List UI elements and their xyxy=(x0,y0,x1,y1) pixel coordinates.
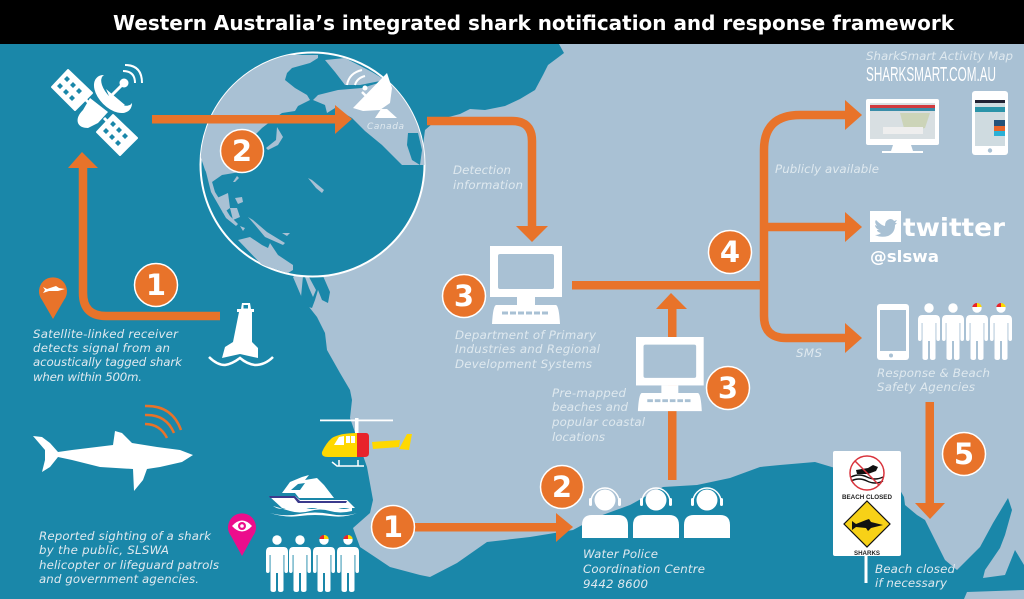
text: department systems: Department of Primary xyxy=(455,328,597,342)
icon: satellite dish in Canada xyxy=(347,70,397,118)
icon: computer, pre-mapped xyxy=(636,337,704,411)
icon: twitter logo xyxy=(870,211,1006,242)
step 2: satellite link xyxy=(220,130,264,172)
text: pre-mapped locations: locations xyxy=(552,430,605,444)
step 2: water police xyxy=(540,466,584,508)
step 3: department systems: 3 xyxy=(454,279,474,313)
text: publicly available: Publicly available xyxy=(775,162,879,176)
icon: satellite xyxy=(52,65,142,155)
text: SMS: SMS xyxy=(796,346,822,360)
step 4: notification channels xyxy=(708,230,752,274)
text: response agencies xyxy=(877,366,990,394)
icon: beach closed sign xyxy=(833,451,901,583)
icon: public and lifeguards xyxy=(266,535,359,592)
text: satellite-linked receiver: Satellite-linked receiver xyxy=(33,327,179,341)
text: satellite-linked receiver: when within 500m. xyxy=(33,370,142,384)
arrow 1: receiver to satellite xyxy=(68,152,220,316)
text: SharkSmart activity map xyxy=(866,49,1013,86)
globe xyxy=(195,52,430,276)
icon: phone map xyxy=(972,91,1008,155)
text: pre-mapped locations: popular coastal xyxy=(551,415,646,429)
icon: beach closed sign: SHARKS xyxy=(854,551,880,557)
text: detection information xyxy=(453,163,523,192)
arrow: detection information xyxy=(427,121,548,242)
text: department systems xyxy=(455,328,601,371)
text: pre-mapped locations: Pre-mapped xyxy=(552,386,626,400)
arrow: systems to channels xyxy=(572,100,862,353)
text: satellite-linked receiver xyxy=(33,327,183,384)
text: reported sighting: and government agencies. xyxy=(39,572,199,586)
icon: helicopter xyxy=(320,418,412,466)
step 3: pre-mapped systems xyxy=(706,366,750,410)
label: Canada: Canada xyxy=(367,122,404,132)
icon: pink sighting pin xyxy=(228,513,256,556)
coastal inlet below globe xyxy=(301,276,330,308)
step 1: receiver xyxy=(134,264,178,306)
text: beach closed xyxy=(875,562,956,590)
text: SharkSmart activity map: SharkSmart Activity Map xyxy=(866,49,1013,63)
title bar xyxy=(0,0,1024,44)
text: department systems: Development Systems xyxy=(455,357,592,371)
text: satellite-linked receiver: acoustically tagged shark xyxy=(33,355,183,369)
text: water police: Water Police xyxy=(583,547,658,561)
text: reported sighting xyxy=(39,529,219,586)
text: reported sighting: helicopter or lifeguard patrols xyxy=(39,558,219,572)
text: satellite-linked receiver: detects signal from an xyxy=(33,341,170,355)
icon: SMS phone xyxy=(877,304,909,360)
text: water police: 9442 8600 xyxy=(583,577,648,591)
text: beach closed: Beach closed xyxy=(875,562,956,576)
icon: beach closed sign: BEACH CLOSED xyxy=(842,494,892,501)
icon: computer, department xyxy=(490,246,562,324)
step 1: reported sighting: 1 xyxy=(383,510,403,544)
title: Western Australia’s integrated shark notification and response framework xyxy=(113,11,955,35)
text: detection information: information xyxy=(453,178,523,192)
icon: shark xyxy=(33,431,193,491)
text: twitter handle: @slswa xyxy=(870,247,939,266)
step 4: notification channels: 4 xyxy=(720,235,740,269)
text: response agencies: Safety Agencies xyxy=(877,380,975,394)
icon: desktop map xyxy=(866,99,939,153)
step 3: pre-mapped systems: 3 xyxy=(718,371,738,405)
text: reported sighting: by the public, SLSWA xyxy=(39,543,169,557)
text: pre-mapped locations: beaches and xyxy=(552,400,628,414)
icon: shark signal waves xyxy=(145,406,181,438)
arrow 2: satellite to Canada xyxy=(152,105,352,134)
step 3: department systems xyxy=(442,274,486,318)
arrow: reported sighting to water police xyxy=(410,513,573,542)
text: department systems: Industries and Regional xyxy=(455,342,601,356)
text: water police: Coordination Centre xyxy=(583,562,705,576)
arrow: water police to systems xyxy=(656,293,687,480)
icon: response agency people xyxy=(918,303,1012,360)
step 5: beach closure: 5 xyxy=(954,437,974,471)
step 5: beach closure xyxy=(942,432,986,476)
icon: boat xyxy=(269,475,357,517)
text: beach closed: if necessary xyxy=(875,576,948,590)
step 1: reported sighting xyxy=(372,506,414,548)
step 1: receiver: 1 xyxy=(146,268,166,302)
text: detection information: Detection xyxy=(453,163,511,177)
icon: water police operators xyxy=(582,488,730,538)
text: water police xyxy=(583,547,705,591)
icon: twitter logo: twitter xyxy=(903,213,1006,242)
icon: orange shark pin xyxy=(39,277,67,319)
text: pre-mapped locations xyxy=(551,386,646,444)
text: response agencies: Response & Beach xyxy=(877,366,990,380)
step 2: water police: 2 xyxy=(552,470,572,504)
arrow: agencies to beach closure xyxy=(915,402,945,519)
step 2: satellite link: 2 xyxy=(232,134,252,168)
icon: buoy xyxy=(209,303,273,365)
text: reported sighting: Reported sighting of a shark xyxy=(39,529,212,543)
